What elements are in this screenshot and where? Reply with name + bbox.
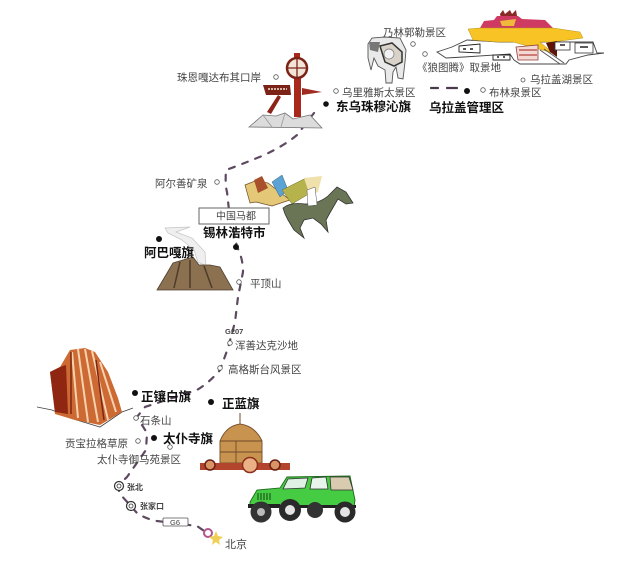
illustration: Potala-style palace bbox=[437, 10, 604, 64]
illustration: running horses bbox=[245, 175, 353, 238]
place labels: regular: 乃林郭勒景区 bbox=[383, 26, 446, 39]
interchange: 张家口 bbox=[126, 501, 164, 511]
label box: 中国马都 bbox=[199, 208, 269, 224]
place labels: regular: 贡宝拉格草原 bbox=[65, 437, 128, 450]
place labels: bold banners: 东乌珠穆沁旗 bbox=[336, 99, 412, 114]
place labels: regular: 高格斯台风景区 bbox=[228, 363, 302, 376]
highway label G6: G6 bbox=[170, 518, 180, 527]
icon: Beijing star bbox=[204, 529, 223, 545]
place labels: bold banners: 正镶白旗 bbox=[141, 389, 192, 404]
place labels: bold banners: 乌拉盖管理区 bbox=[429, 100, 504, 115]
highway label G207: G207 bbox=[225, 327, 243, 336]
place labels: regular: 乌里雅斯太景区 bbox=[342, 86, 416, 99]
place labels: regular: 浑善达克沙地 bbox=[235, 339, 298, 352]
interchange: 张北: 张北 bbox=[127, 482, 143, 492]
interchange: 张家口: 张家口 bbox=[140, 501, 164, 511]
place labels: bold banners: 太仆寺旗 bbox=[163, 431, 214, 446]
place labels: regular: 乌拉盖湖景区 bbox=[530, 73, 593, 86]
route: dashed road line bbox=[119, 88, 457, 533]
place labels: regular: 太仆寺御马苑景区 bbox=[97, 453, 181, 466]
place labels: regular: 阿尔善矿泉 bbox=[155, 177, 208, 190]
highway label G6 bbox=[163, 518, 188, 527]
illustration: wolf bbox=[368, 37, 406, 83]
illustration: signpost on rocks bbox=[249, 53, 322, 128]
illustration: volcano mountain bbox=[157, 227, 233, 290]
place labels: bold banners: 正蓝旗 bbox=[222, 396, 260, 411]
illustration: green jeep bbox=[248, 476, 356, 522]
place labels: regular: 珠恩嘎达布其口岸 bbox=[177, 71, 261, 84]
place labels: regular: 平顶山 bbox=[250, 278, 282, 290]
interchange: 张北 bbox=[114, 482, 143, 492]
place labels: regular: 《狼图腾》取景地 bbox=[417, 61, 501, 74]
illustration: yurt on cart bbox=[200, 413, 290, 472]
place labels: bold banners: 锡林浩特市 bbox=[203, 225, 266, 240]
place labels: bold banners: 阿巴嘎旗 bbox=[144, 245, 195, 260]
place labels: regular: 石条山 bbox=[140, 414, 172, 427]
place labels: regular bbox=[65, 26, 593, 551]
major stops bbox=[132, 88, 470, 441]
place labels: regular: 北京 bbox=[225, 537, 247, 551]
illustration: red striped rock bbox=[37, 348, 133, 427]
place labels: regular: 布林泉景区 bbox=[489, 86, 542, 99]
minor scenic spot markers bbox=[134, 42, 525, 449]
place labels: bold banners bbox=[141, 99, 504, 446]
label box: 中国马都: 中国马都 bbox=[216, 210, 256, 222]
